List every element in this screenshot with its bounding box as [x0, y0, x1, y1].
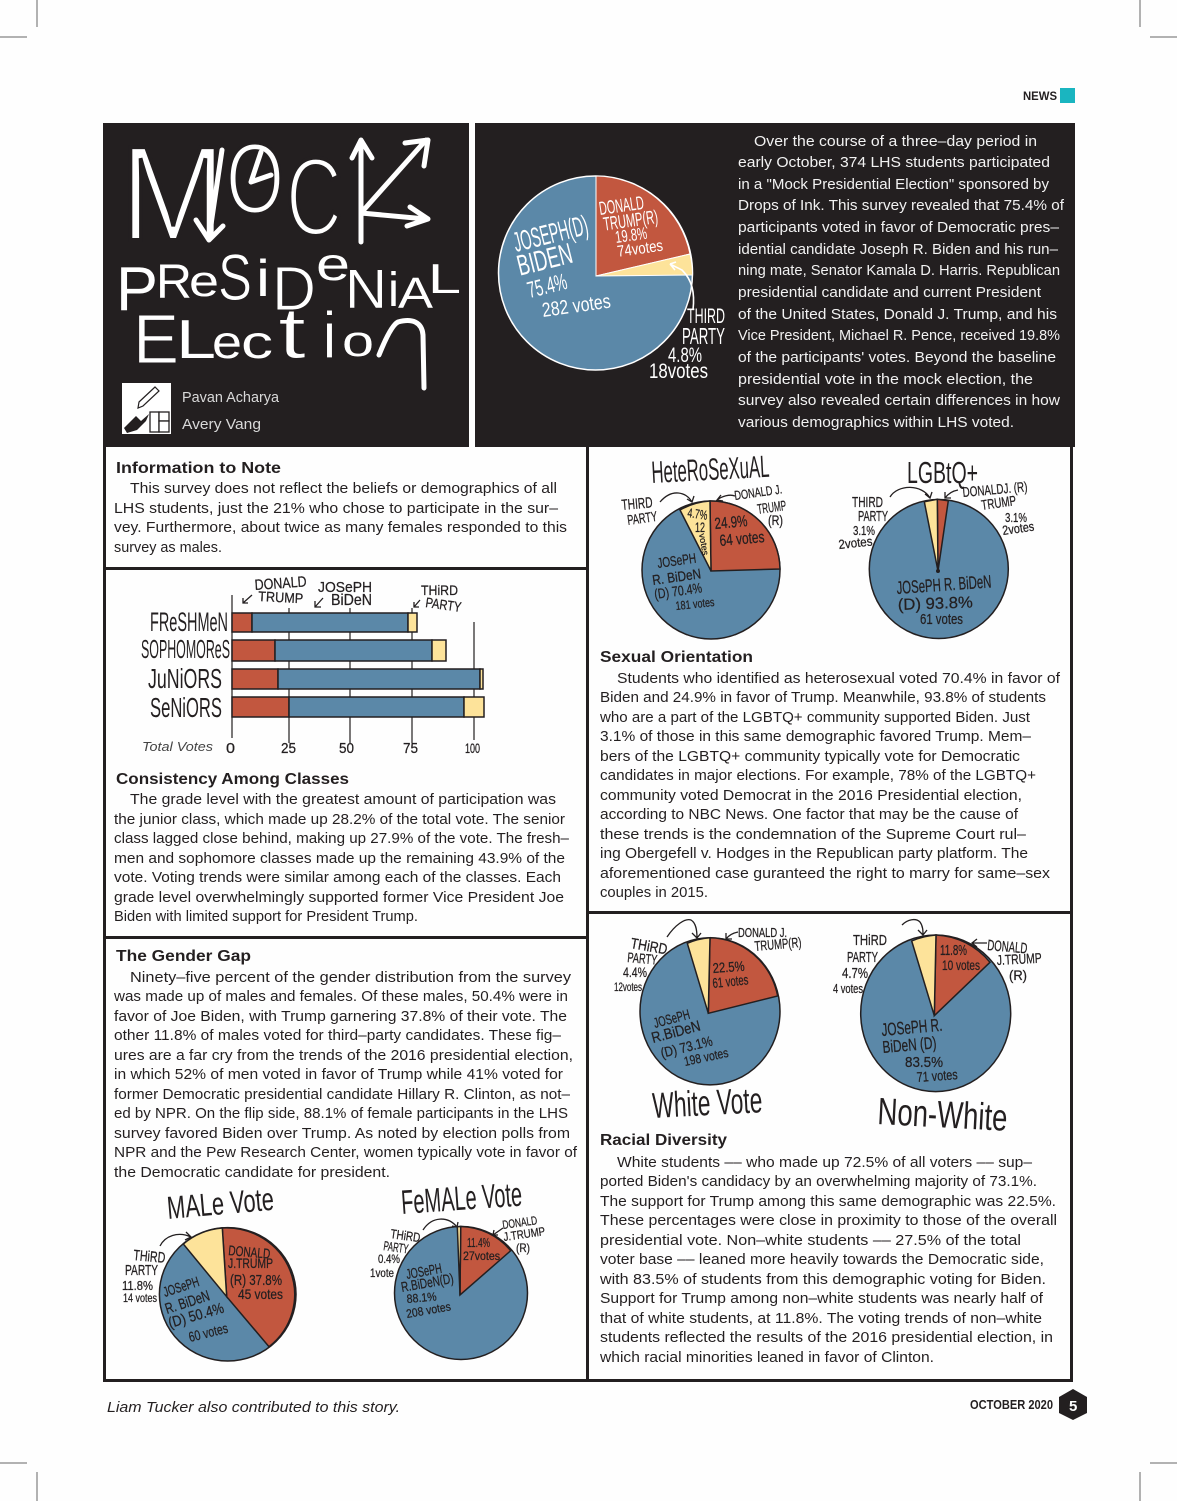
text block: the gender gap: other 11.8% of males voted for third–party candidates. These fig– [114, 1028, 562, 1044]
pie chart: heterosexual: TRUMP [756, 497, 787, 517]
title: Mock Presidential Election: L [428, 255, 461, 302]
text block: racial diversity: The support for Trump among this same demographic was 22.5%. [600, 1194, 1056, 1210]
panel: title [103, 118, 469, 447]
credit line: Liam Tucker also contributed to this story. [107, 1399, 400, 1416]
pie chart: male vote: 45 votes [238, 1286, 283, 1302]
pie chart: female vote: 0.4% [378, 1252, 400, 1266]
pie chart: non-white vote: DONALD [987, 937, 1028, 957]
pie chart: female vote: THiRD [390, 1226, 421, 1245]
text block: consistency among classes: class lagged close behind, making up 27.9% of the vote. The fresh– [114, 831, 570, 847]
panel: information to note: survey as males. [114, 540, 222, 556]
intro text: of the participants' votes. Beyond the baseline [738, 350, 1056, 366]
pie chart: heterosexual: 64 votes [719, 529, 765, 550]
pie chart: heterosexual [621, 449, 787, 639]
pie chart: overall vote: 18votes [649, 360, 708, 383]
pie chart: female vote: FeMALe Vote [400, 1176, 523, 1222]
title: Mock Presidential Election: t [278, 294, 306, 374]
text block: sexual orientation: Biden and 24.9% in favor of Trump. Meanwhile, 93.8% of students [600, 690, 1046, 706]
text block: the gender gap: Ninety–five percent of the gender distribution from the survey [130, 970, 572, 986]
pie chart: white vote: PARTY [627, 949, 658, 968]
bar chart: votes by class: THiRD [421, 582, 458, 598]
bar chart: votes by class: SOPHOMOReS [141, 634, 230, 664]
pie chart: overall vote: THIRD [687, 305, 725, 328]
bar chart: votes by class: BiDeN [331, 592, 372, 609]
pie chart: overall vote [498, 176, 725, 383]
intro text: early October, 374 LHS students participated [738, 155, 1050, 171]
text block: the gender gap: favor of Joe Biden, with Trump garnering 37.8% of their vote. The [114, 1009, 567, 1025]
text block: the gender gap: in which 52% of men voted in favor of Trump while 41% voted for [114, 1067, 563, 1083]
panel: overall results [475, 123, 1075, 447]
text block: the gender gap: ed by NPR. On the flip side, 88.1% of female participants in the LHS [114, 1106, 568, 1122]
text block: sexual orientation: 3.1% of those in this same demographic favored Trump. Mem– [600, 729, 1032, 745]
pie chart: lgbtq: 2votes [838, 533, 874, 552]
title: Mock Presidential Election: e [316, 238, 350, 290]
bar chart: votes by class: FReSHMeN [150, 607, 228, 637]
pie chart: male vote: DONALD [228, 1242, 271, 1262]
bar chart: votes by class: 25 [281, 740, 296, 757]
title: Mock Presidential Election: R [156, 256, 192, 309]
text block: sexual orientation: Sexual Orientation [600, 649, 753, 666]
pie chart: white vote: 198 votes [683, 1045, 730, 1069]
pie chart: lgbtq: 61 votes [920, 611, 963, 628]
bar chart: votes by class: 50 [339, 740, 354, 757]
intro text: participants voted in favor of Democratic pres– [738, 220, 1060, 236]
pie chart: white vote: JOSePH [652, 1006, 692, 1031]
bar chart: votes by class: PARTY [425, 594, 463, 615]
text block: racial diversity: ported Biden's candidacy by an overwhelming majority of 73.1%. [600, 1174, 1037, 1190]
text block: sexual orientation: candidates in major elections. For example, 78% of the LGBTQ+ [600, 768, 1036, 784]
bar chart: votes by class: SeNiORS [150, 692, 222, 723]
pie chart: male vote: 14 votes [123, 1291, 157, 1305]
text block: racial diversity: voter base –– leaned more heavily towards the Democratic side, [600, 1252, 1044, 1268]
bar chart: votes by class: JuNiORS [148, 663, 222, 694]
pie chart: heterosexual: THIRD [621, 494, 653, 514]
text block: sexual orientation: couples in 2015. [600, 885, 708, 901]
pie chart: white vote: 61 votes [712, 971, 749, 991]
pie chart: male vote: PARTY [125, 1262, 158, 1279]
pie chart: lgbtq: 3.1% [853, 523, 875, 538]
text block: the gender gap: the Democratic candidate for president. [114, 1165, 390, 1181]
bar chart: votes by class: 0 [226, 740, 235, 757]
intro text: Vice President, Michael R. Pence, received 19.8% [738, 328, 1060, 344]
pie chart: female vote: 1vote [370, 1266, 394, 1280]
pie chart: non-white vote: JOSePH R. [881, 1015, 943, 1040]
pie chart: lgbtq [838, 455, 1036, 638]
title: Mock Presidential Election: S [218, 240, 252, 314]
byline names: Pavan Acharya [182, 390, 280, 406]
text block: racial diversity: which racial minorities leaned in favor of Clinton. [599, 1350, 934, 1366]
text block: consistency among classes [114, 771, 570, 925]
pie chart: male vote: MALe Vote [165, 1181, 275, 1226]
text block: racial diversity: students reflected the results of the 2016 presidential election, in [600, 1330, 1053, 1346]
pie chart: overall vote: PARTY [682, 323, 725, 349]
intro text: ning mate, Senator Kamala D. Harris. Republican [738, 263, 1060, 279]
pie chart: heterosexual: PARTY [626, 508, 659, 528]
bar chart: votes by class: 100 [465, 740, 480, 756]
text block: sexual orientation: community voted Democrat in the 2016 Presidential election, [600, 788, 1022, 804]
pie chart: white vote: DONALD J. [738, 925, 787, 940]
text block: sexual orientation [599, 649, 1061, 901]
pie chart: heterosexual: HeteRoSeXuAL [651, 449, 770, 490]
pie chart: female vote: J.TRUMP [502, 1224, 546, 1244]
text block: racial diversity: Support for Trump among non–white students was nearly half of [600, 1291, 1044, 1307]
title: Mock Presidential Election: D [272, 255, 316, 324]
pie chart: female vote: R.BiDeN(D) [400, 1270, 455, 1295]
title: Mock Presidential Election: N [345, 257, 387, 320]
pie chart: heterosexual: (R) [768, 512, 783, 528]
text block: consistency among classes: Consistency Among Classes [116, 771, 349, 788]
title: Mock Presidential Election: e [189, 257, 219, 306]
bar chart: votes by class: JOSePH [318, 579, 372, 596]
pie chart: overall vote: 4.8% [668, 344, 702, 367]
pie chart: heterosexual: votes [697, 533, 711, 557]
pie chart: overall vote: 75.4% [524, 268, 570, 303]
pie chart: heterosexual: 4.7% [687, 505, 709, 523]
section tag: news: NEWS [1023, 89, 1057, 103]
pie chart: lgbtq: THIRD [852, 494, 883, 511]
pie chart: white vote: White Vote [651, 1079, 763, 1126]
pie chart: white vote: TRUMP(R) [754, 934, 802, 954]
pie chart: lgbtq: (D) 93.8% [898, 594, 973, 614]
text block: the gender gap: survey favored Biden over Trump. As noted by election polls from [114, 1126, 570, 1142]
pie chart: lgbtq: JOSePH R. BiDeN [896, 571, 992, 598]
text block: sexual orientation: aforementioned case guranteed the right to marry for same–sex [600, 866, 1051, 882]
title: Mock Presidential Election: P [116, 255, 158, 324]
text block: the gender gap: The Gender Gap [116, 948, 251, 965]
text block: sexual orientation: according to NBC News. One factor that may be the cause of [600, 807, 1019, 823]
text block: the gender gap [113, 948, 578, 1181]
title: Mock Presidential Election: C [286, 136, 342, 259]
text block: racial diversity [599, 1132, 1057, 1366]
intro text: presidential candidate and current President [738, 285, 1041, 301]
panel: information to note: This survey does not reflect the beliefs or demographics of all [130, 481, 557, 497]
text block: racial diversity: These percentages were close in proximity to those of the overall [600, 1213, 1057, 1229]
intro text: in a "Mock Presidential Election" sponsored by [738, 177, 1050, 193]
pie chart: heterosexual: DONALD J. [733, 481, 783, 503]
text block: sexual orientation: these trends is the condemnation of the Supreme Court rul– [600, 827, 1027, 843]
title: Mock Presidential Election: i [322, 298, 337, 372]
title: Mock Presidential Election: O [226, 123, 284, 235]
text block: sexual orientation: Students who identified as heterosexual voted 70.4% in favor of [617, 671, 1061, 687]
panel: information to note: vey. Furthermore, about twice as many females responded to this [114, 520, 567, 536]
intro text [738, 134, 1065, 431]
pie chart: overall vote: JOSEPH(D) [510, 209, 591, 258]
intro text: various demographics within LHS voted. [738, 415, 1014, 431]
pie chart: male vote: (D) 50.4% [166, 1300, 226, 1332]
pie chart: female vote: DONALD [501, 1213, 538, 1232]
pie chart: heterosexual: 181 votes [675, 595, 715, 613]
text block: sexual orientation: who are a part of the LGBTQ+ community supported Biden. Just [599, 710, 1030, 726]
intro text: idential candidate Joseph R. Biden and his run– [738, 242, 1059, 258]
pie chart: non-white vote [833, 920, 1042, 1140]
pie chart: non-white vote: 4.7% [842, 965, 868, 982]
pie chart: lgbtq: LGBtQ+ [907, 455, 978, 490]
section tag: news [1023, 88, 1075, 103]
pie chart: lgbtq: 2votes [1001, 519, 1036, 538]
pie chart: male vote [122, 1181, 296, 1361]
title: Mock Presidential Election: i [388, 264, 399, 317]
title: Mock Presidential Election: e [212, 316, 242, 368]
pie chart: overall vote: DONALD [598, 193, 645, 220]
pie chart: heterosexual: 24.9% [714, 513, 748, 533]
text block: consistency among classes: Biden with limited support for President Trump. [114, 909, 418, 925]
pie chart: non-white vote: PARTY [847, 949, 878, 966]
intro text: Drops of Ink. This survey revealed that 75.4% of [738, 198, 1065, 214]
pie chart: lgbtq: TRUMP [980, 492, 1017, 513]
byline names: Avery Vang [182, 417, 261, 433]
text block: the gender gap: was made up of males and females. Of these males, 50.4% were in [113, 989, 568, 1005]
text block: racial diversity: presidential vote. Non–white students –– 27.5% of the total [600, 1233, 1021, 1249]
footer date: OCTOBER 2020 [970, 1397, 1053, 1412]
text block: racial diversity: White students –– who made up 72.5% of all voters –– sup– [617, 1155, 1033, 1171]
pie chart: white vote: 4.4% [623, 964, 647, 980]
pie chart: white vote: 22.5% [712, 958, 745, 976]
pie chart: non-white vote: Non-White [877, 1091, 1009, 1140]
panel: information to note [114, 460, 567, 556]
pie chart: heterosexual: (D) 70.4% [653, 579, 703, 602]
text block: racial diversity: Racial Diversity [600, 1132, 727, 1149]
pie chart: male vote: R. BiDeN [163, 1287, 212, 1318]
pie chart: female vote: 88.1% [406, 1289, 437, 1306]
pie chart: heterosexual: JOSePH [656, 550, 697, 571]
text block: the gender gap: ures are a far cry from the trends of the 2016 presidential election, [114, 1048, 573, 1064]
pie chart: white vote: 12votes [614, 980, 642, 994]
pie chart: non-white vote: 71 votes [916, 1066, 958, 1085]
title: Mock Presidential Election: c [241, 316, 273, 368]
pie chart: non-white vote: 11.8% [940, 942, 967, 959]
icon: byline [122, 383, 171, 434]
pie chart: overall vote: BIDEN [514, 238, 576, 283]
pie chart: female vote [370, 1176, 546, 1360]
text block: racial diversity: with 83.5% of students from this demographic voting for Biden. [599, 1272, 1046, 1288]
title: Mock Presidential Election: A [398, 269, 434, 318]
title: Mock Presidential Election: M [120, 118, 226, 269]
pie chart: overall vote: 74votes [616, 238, 664, 261]
text block: racial diversity: that of white students, at 11.8%. The voting trends of non–white [600, 1311, 1042, 1327]
pie chart: lgbtq: DONALDJ. (R) [962, 478, 1028, 500]
page number: 5 [1069, 1398, 1077, 1415]
title: Mock Presidential Election [116, 118, 461, 388]
panel: information to note: Information to Note [116, 460, 281, 477]
text block: sexual orientation: bers of the LGBTQ+ community typically vote for Democratic [600, 749, 1020, 765]
bar chart: votes by class: DONALD [254, 573, 307, 594]
pie chart: male vote: J.TRUMP [228, 1255, 273, 1271]
pie chart: male vote: 60 votes [187, 1320, 230, 1345]
intro text: of the United States, Donald J. Trump, and his [738, 307, 1057, 323]
bar chart: votes by class [141, 573, 484, 757]
text block: the gender gap: NPR and the Pew Research Center, women typically vote in favor of [114, 1145, 578, 1161]
pie chart: heterosexual: R. BiDeN [651, 565, 702, 588]
text block: sexual orientation: ing Obergefell v. Hodges in the Republican party platform. The [600, 846, 1028, 862]
pie chart: non-white vote: (R) [1009, 967, 1027, 983]
pie chart: male vote: (R) 37.8% [230, 1272, 282, 1289]
pie chart: female vote: 27votes [463, 1249, 500, 1263]
byline names [182, 390, 280, 433]
pie chart: female vote: (R) [516, 1241, 530, 1255]
intro text: presidential vote in the mock election, the [738, 372, 1033, 388]
pie chart: male vote: THiRD [133, 1247, 166, 1267]
pie chart: female vote: PARTY [383, 1238, 410, 1256]
page number [1059, 1389, 1087, 1420]
pie chart: lgbtq: PARTY [858, 508, 888, 525]
intro text: Over the course of a three–day period in [754, 134, 1037, 150]
title: Mock Presidential Election: o [342, 317, 374, 366]
title: Mock Presidential Election: E [133, 300, 179, 378]
pie chart: overall vote: 282 votes [541, 291, 612, 322]
pie chart: non-white vote: BiDeN (D) [882, 1033, 937, 1057]
text block: consistency among classes: vote. Voting trends were similar among each of the classes. Each [114, 870, 561, 886]
bar chart: votes by class: TRUMP [258, 588, 304, 606]
pie chart: non-white vote: 10 votes [942, 957, 980, 973]
text block: consistency among classes: men and sophomore classes made up the remaining 43.9% of the [114, 851, 565, 867]
pie chart: lgbtq: 3.1% [1005, 510, 1027, 525]
pie chart: male vote: JOSePH [161, 1273, 201, 1300]
pie chart: overall vote: TRUMP(R) [602, 207, 659, 236]
pie chart: female vote: JOSePH [405, 1260, 443, 1282]
title: Mock Presidential Election: L [176, 308, 216, 370]
pie chart: overall vote: 19.8% [614, 224, 648, 247]
title: Mock Presidential Election: i [256, 250, 270, 308]
pie chart: female vote: 208 votes [405, 1299, 452, 1321]
bar chart: votes by class: Total Votes [142, 739, 214, 754]
pie chart: female vote: 11.4% [467, 1235, 490, 1250]
intro text: survey also revealed certain differences in how [738, 393, 1061, 409]
text block: consistency among classes: The grade level with the greatest amount of participation was [130, 792, 556, 808]
pie chart: non-white vote: THiRD [853, 932, 887, 949]
pie chart: white vote [614, 920, 802, 1126]
pie chart: non-white vote: 4 votes [833, 981, 863, 996]
pie chart: white vote: R.BiDeN [650, 1018, 702, 1047]
panel: information to note: LHS students, just the 21% who chose to participate in the sur– [114, 501, 559, 517]
bar chart: votes by class: 75 [403, 740, 418, 757]
pie chart: non-white vote: J.TRUMP [996, 950, 1042, 968]
pie chart: non-white vote: 83.5% [905, 1054, 943, 1071]
pie chart: male vote: 11.8% [122, 1278, 153, 1293]
text block: consistency among classes: grade level overwhelmingly supported former Vice President Joe [114, 890, 564, 906]
pie chart: heterosexual: 12 [695, 519, 705, 535]
pie chart: white vote: (D) 73.1% [659, 1033, 714, 1061]
text block: consistency among classes: the junior class, which made up 28.2% of the total vote. The senior [114, 812, 565, 828]
text block: the gender gap: former Democratic presidential candidate Hillary R. Clinton, as not– [114, 1087, 571, 1103]
pie chart: white vote: THiRD [629, 935, 669, 958]
